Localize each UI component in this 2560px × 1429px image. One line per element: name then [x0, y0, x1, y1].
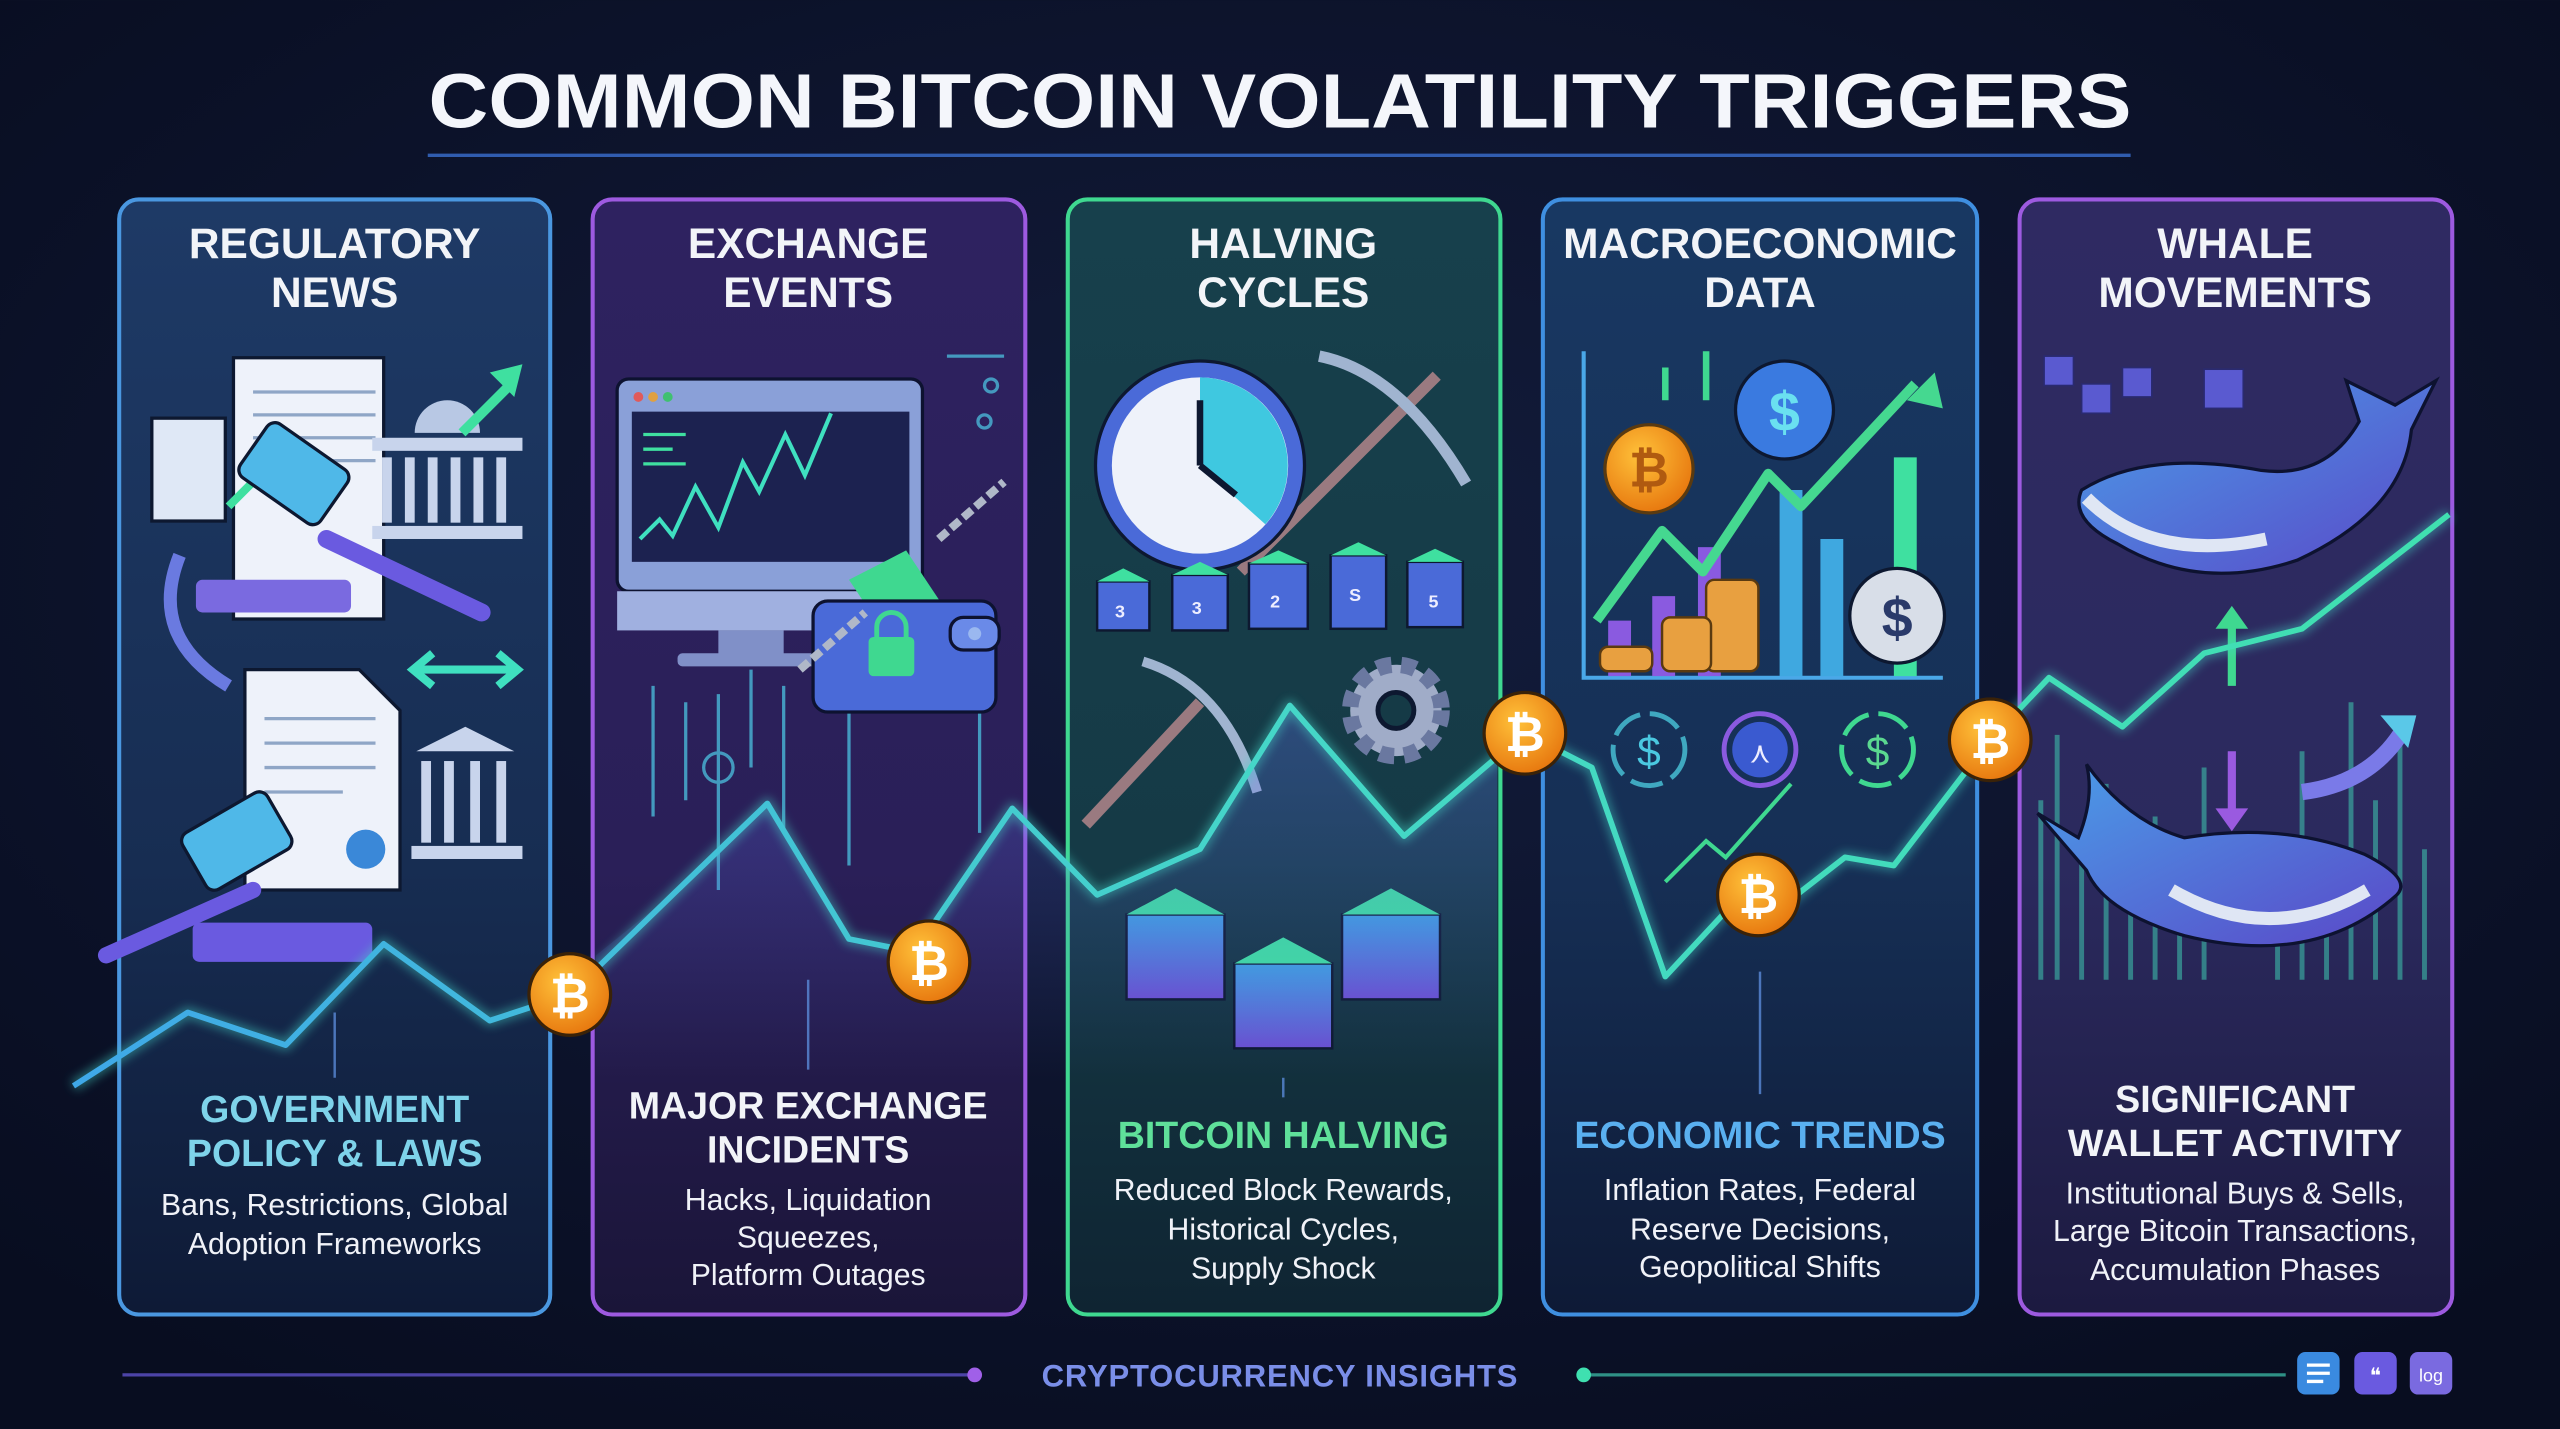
icon: chart with coins: [1584, 351, 1944, 882]
footer: [122, 1352, 2452, 1394]
text: halving description: Supply Shock: [1191, 1253, 1376, 1286]
text: exchange description: Hacks, Liquidation: [685, 1184, 932, 1217]
text: regulatory description: Bans, Restrictions, Global: [161, 1189, 508, 1222]
heading: halving cycles: CYCLES: [1197, 269, 1369, 316]
subheading: major exchange incidents: INCIDENTS: [707, 1129, 909, 1171]
icon: clock, pickaxes, blocks, gear: 3: [1115, 601, 1125, 621]
icon: chart with coins: $: [1637, 728, 1661, 775]
subheading: bitcoin halving: BITCOIN HALVING: [1118, 1114, 1449, 1156]
heading: whale movements: MOVEMENTS: [2098, 269, 2372, 316]
text: macro description: Inflation Rates, Federal: [1604, 1174, 1916, 1207]
icon: bitcoin coin 2: [888, 921, 970, 1003]
subheading: government policy: POLICY & LAWS: [187, 1132, 482, 1174]
icon: bitcoin coin 5: ₿: [1970, 715, 2010, 769]
text: halving description: Historical Cycles,: [1168, 1213, 1399, 1246]
heading: exchange events: EXCHANGE: [688, 220, 928, 267]
panel: macroeconomic data: [1543, 199, 1977, 1315]
heading: whale movements: WHALE: [2157, 220, 2313, 267]
text: macro description: Reserve Decisions,: [1630, 1213, 1890, 1246]
subheading: government policy: GOVERNMENT: [200, 1088, 469, 1130]
text: regulatory description: Adoption Frameworks: [188, 1228, 481, 1261]
heading: macroeconomic data: MACROECONOMIC: [1563, 220, 1957, 267]
icon: bitcoin coin 4: [1718, 854, 1799, 936]
icon: clock, pickaxes, blocks, gear: 5: [1428, 592, 1438, 612]
text: whale description: Institutional Buys & Sells,: [2066, 1177, 2405, 1210]
icon: bitcoin coin 2: ₿: [909, 937, 949, 991]
icon: whales and data bars: [2038, 356, 2436, 980]
icon: documents, gavel, building: [106, 358, 522, 962]
title: COMMON BITCOIN VOLATILITY TRIGGERS: [429, 60, 2131, 145]
footer: CRYPTOCURRENCY INSIGHTS: [1042, 1358, 1518, 1393]
heading: exchange events: EVENTS: [723, 269, 893, 316]
text: macro description: Geopolitical Shifts: [1639, 1251, 1881, 1284]
icon: chart with coins: ₿: [1629, 444, 1669, 498]
icon: footer badges: ❝: [2370, 1365, 2381, 1388]
icon: monitor with chart and locked wallet: [617, 356, 1004, 890]
text: whale description: Large Bitcoin Transactions,: [2053, 1215, 2417, 1248]
heading: regulatory news: REGULATORY: [189, 220, 480, 267]
icon: footer badges: [2297, 1352, 2452, 1394]
chart: price line across panels: [73, 514, 2449, 1097]
panel: regulatory news: [106, 199, 550, 1315]
icon: clock, pickaxes, blocks, gear: 3: [1192, 598, 1202, 618]
text: exchange description: Squeezes,: [737, 1222, 879, 1255]
icon: chart with coins: $: [1769, 381, 1800, 443]
text: halving description: Reduced Block Rewards,: [1114, 1174, 1453, 1207]
subheading: significant wallet activity: SIGNIFICANT: [2115, 1078, 2355, 1120]
icon: footer badges: log: [2419, 1365, 2443, 1385]
panel: whale movements: [2020, 199, 2452, 1315]
panel: halving cycles: [1068, 199, 1500, 1315]
icon: clock, pickaxes, blocks, gear: [1086, 356, 1466, 1048]
icon: bitcoin coin 4: ₿: [1738, 870, 1778, 924]
icon: bitcoin coin 3: [1484, 692, 1566, 774]
icon: chart with coins: $: [1882, 587, 1913, 649]
icon: bitcoin coin 3: ₿: [1505, 708, 1545, 762]
subheading: significant wallet activity: WALLET ACTIVITY: [2068, 1122, 2402, 1164]
icon: clock, pickaxes, blocks, gear: 2: [1270, 592, 1280, 612]
icon: clock, pickaxes, blocks, gear: S: [1349, 585, 1361, 605]
heading: regulatory news: NEWS: [271, 269, 398, 316]
heading: halving cycles: HALVING: [1189, 220, 1377, 267]
text: whale description: Accumulation Phases: [2090, 1254, 2380, 1287]
icon: bitcoin coin 5: [1949, 699, 2031, 781]
icon: bitcoin coin 1: [529, 954, 611, 1035]
panel: exchange events: [593, 199, 1025, 1315]
icon: chart with coins: ⋏: [1749, 737, 1771, 770]
icon: chart with coins: $: [1866, 728, 1889, 775]
subheading: economic trends: ECONOMIC TRENDS: [1574, 1114, 1946, 1156]
text: exchange description: Platform Outages: [691, 1259, 926, 1292]
icon: bitcoin coin 1: ₿: [550, 969, 590, 1023]
heading: macroeconomic data: DATA: [1704, 269, 1816, 316]
subheading: major exchange incidents: MAJOR EXCHANGE: [629, 1085, 988, 1127]
